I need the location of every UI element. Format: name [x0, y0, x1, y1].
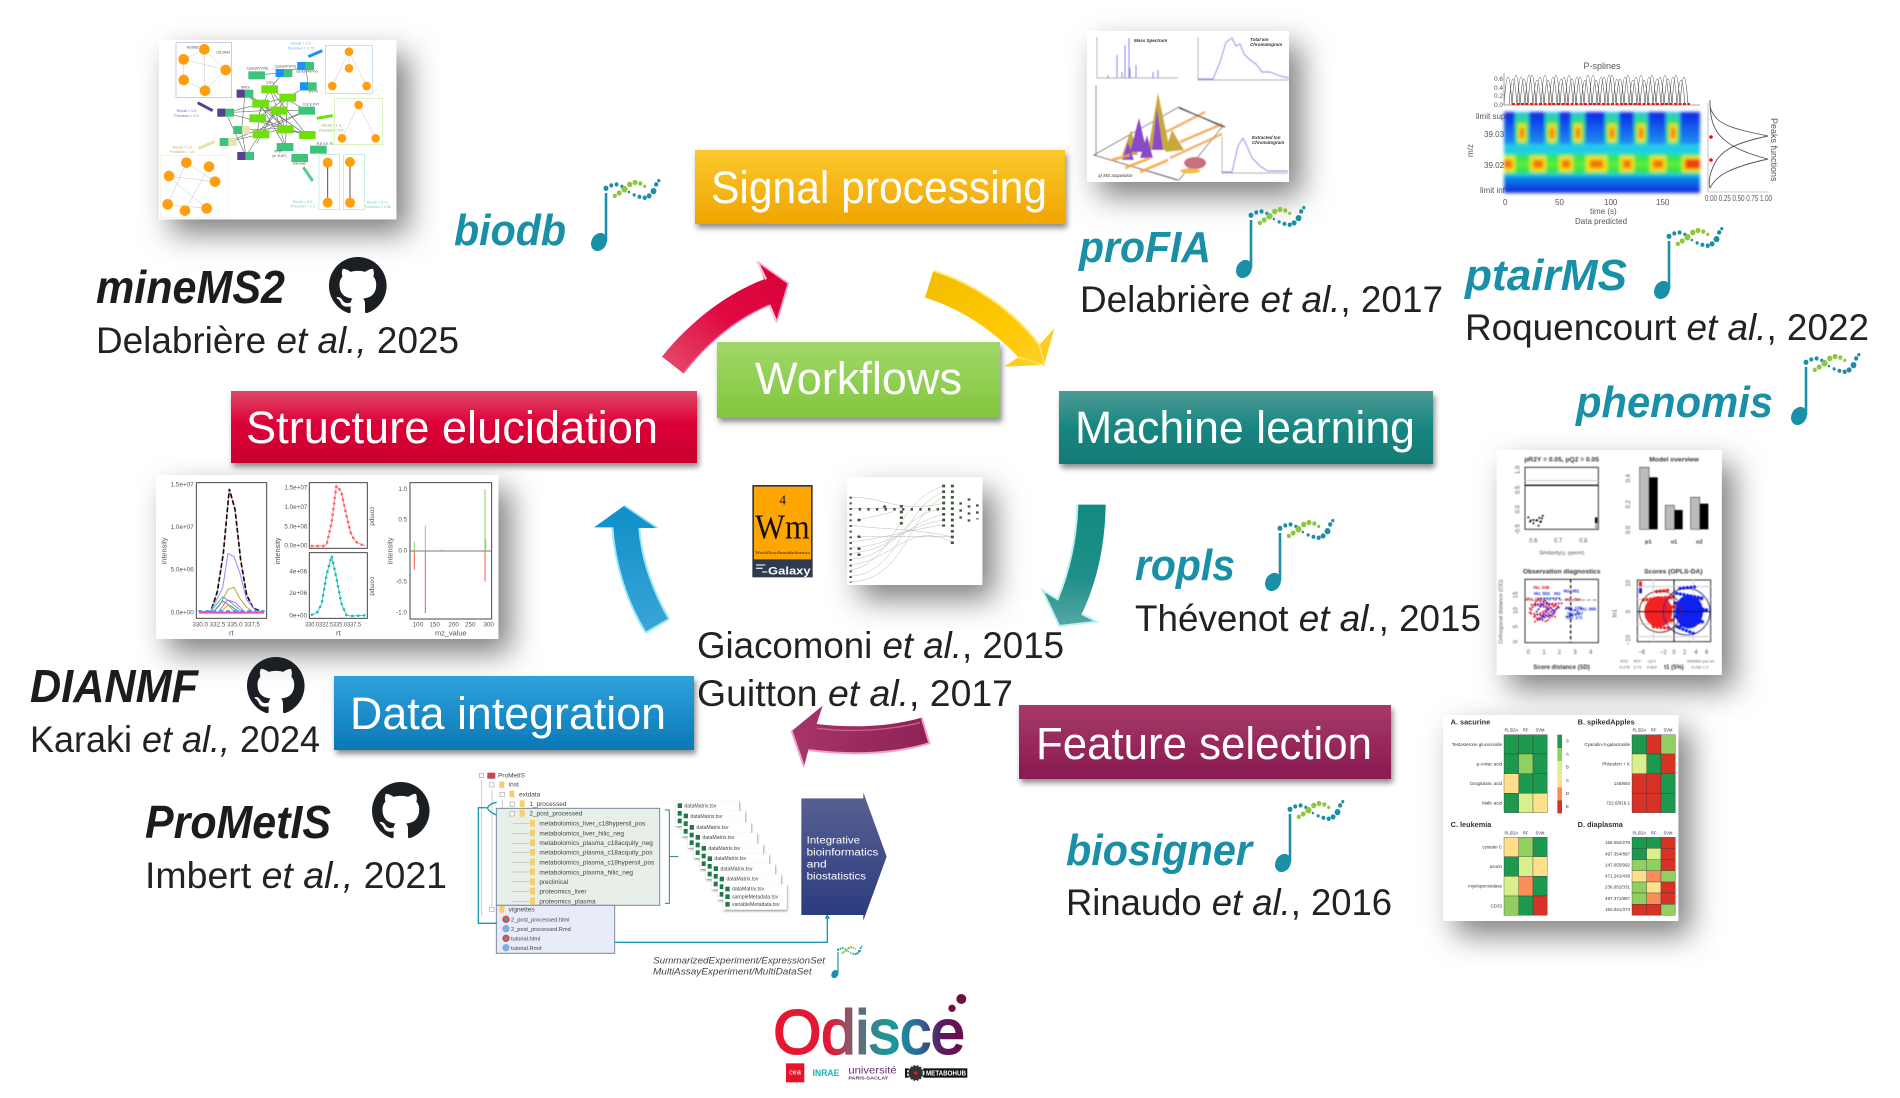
panel: ropls plots: 4: [1694, 650, 1698, 656]
chart: ptairMS heatmap with P-splines: P-splines: [1583, 61, 1621, 71]
citation: Roquencourt 2022: Roquencourt et al., 2022: [1465, 307, 1869, 348]
logo: MetaboHUB: [905, 1065, 967, 1081]
panel: DIANMF chromatograms: 5.0e+06: [284, 523, 308, 530]
file tree labels: metabolomics_plasma_c18acquity_pos: [539, 850, 653, 857]
panel: DIANMF chromatograms: 100: [413, 622, 424, 629]
chart: ptairMS heatmap with P-splines: 100: [1604, 198, 1618, 207]
chart: ptairMS heatmap with P-splines: 150: [1656, 198, 1670, 207]
file tree labels: preclinical: [539, 879, 568, 886]
panel: biosigner heatmaps: SVM: [1663, 830, 1673, 835]
panel: DIANMF chromatograms: rt: [229, 629, 235, 638]
panel: ropls plots: t1 (5%): [1664, 665, 1684, 671]
arrow: Integrative bioinformatics and biostatistics: biostatistics: [807, 871, 866, 882]
file tree labels: metabolomics_plasma_hilic_neg: [539, 869, 633, 876]
label: biosigner: biosigner: [1066, 826, 1255, 875]
panel: mineMS2 network image: VTFV: [266, 81, 275, 85]
panel: biosigner heatmaps: Phloridzin + K: [1602, 761, 1630, 766]
panel: Workflow4Metabolomics logos: [752, 485, 813, 578]
heatmap A: [1504, 735, 1547, 813]
panel: mineMS2 network image: Recall = 1.0,: [173, 145, 193, 149]
panel: mineMS2 network image: Recall = 1.0,: [291, 42, 311, 46]
file tree labels: tutorial.Rmd: [511, 946, 541, 952]
panel: ropls plots: 2: [1683, 650, 1687, 656]
panel: ropls plots: -0.5: [1515, 524, 1521, 534]
panel: biosigner heatmaps: 156.052/276: [1605, 840, 1630, 845]
panel: DIANMF chromatograms: 1.0e+07: [284, 504, 308, 511]
heatmap D: [1632, 837, 1675, 915]
icon: GitHub mineMS2: [329, 257, 387, 313]
panel: ropls plots: p1: [1645, 539, 1652, 545]
arrow: Integrative bioinformatics and biostatistics: Integrative: [807, 835, 861, 846]
caption: data classes: [653, 955, 826, 976]
panel: biosigner heatmaps: A. sacurine: [1451, 717, 1490, 726]
panel: mineMS2 network image: Precision = 0.5: [319, 128, 343, 132]
arrow: burgundy to data integration: [792, 706, 929, 767]
citation: Delabrière 2025: Delabrière et al., 2025: [96, 320, 459, 361]
logo: INRAE: INRAE: [813, 1068, 839, 1078]
panel: DIANMF chromatograms: 0.0: [398, 548, 408, 555]
panel: ropls plots: 5: [1513, 624, 1519, 628]
label: proFIA: proFIA: [1078, 223, 1211, 272]
panel: ropls plots: 15: [1513, 591, 1519, 598]
panel: biosigner heatmaps: SVM: [1663, 728, 1673, 733]
panel: DIANMF chromatograms: 250: [465, 622, 476, 629]
panel: DIANMF chromatograms: 150: [429, 622, 440, 629]
file tree labels: 2_post_processed: [529, 811, 583, 818]
wordmark: Odisce: [773, 998, 965, 1067]
panel: biosigner heatmaps: RF: [1523, 830, 1529, 835]
box: Signal processing: Signal processing: [711, 162, 1047, 213]
panel: DIANMF chromatograms: 200: [448, 622, 459, 629]
panel: ropls plots: HU_502: [1534, 591, 1550, 596]
panel: ropls plots: 0.262 1 2: [1692, 665, 1709, 670]
panel: biosigner heatmaps: CD33: [1491, 903, 1503, 908]
box: Workflows: [717, 342, 1000, 418]
heading: DIANMF: DIANMF: [30, 660, 200, 712]
arrow: yellow to machine learning: [925, 271, 1054, 367]
file tree labels: ProMetIS: [498, 773, 526, 780]
box: Structure elucidation: Structure elucidation: [246, 402, 658, 453]
panel: DIANMF chromatograms: rt: [336, 629, 342, 638]
panel: biosigner heatmaps: 145/693: [1614, 781, 1630, 786]
panel: ropls plots: 6: [1705, 650, 1709, 656]
logo: Université Paris-Saclay: [848, 1065, 897, 1080]
panel: biosigner heatmaps: [1443, 715, 1678, 921]
panel: DIANMF chromatograms: 4e+06: [289, 568, 308, 575]
panel: ropls plots: Score distance (SD): [1533, 665, 1590, 671]
panel: DIANMF chromatograms: compd: [369, 577, 376, 596]
icons: tree expanders: [479, 773, 514, 912]
stacked data tables: dataMatrix.tsv: [696, 825, 729, 831]
panel: DIANMF chromatograms: intensity: [160, 537, 169, 564]
panel: ropls plots: 0.275: [1620, 665, 1630, 670]
panel: biosigner heatmaps: Malic acid: [1482, 801, 1503, 806]
arrow: red to signal processing: [662, 262, 788, 373]
file tree labels: [498, 773, 655, 952]
panel: ropls plots: HU_047: [1567, 611, 1584, 616]
arrow: Integrative bioinformatics and biostatistics: bioinformatics: [807, 847, 878, 858]
panel: mineMS2 network image: Recall = 0.71,: [367, 200, 389, 204]
chart: ptairMS heatmap with P-splines: 0.4: [1494, 85, 1503, 92]
panel: mineMS2 network image: VFVF: [274, 150, 283, 154]
panel: ropls plots: Observation diagnostics: [1523, 568, 1601, 575]
chart: ptairMS heatmap with P-splines: 0.6: [1494, 76, 1503, 83]
panel: mineMS2 network image: Precision = 0.75: [288, 47, 314, 51]
panel: ropls plots: 2: [1558, 650, 1562, 656]
panel: biosigner heatmaps: C. leukemia: [1451, 820, 1492, 829]
panel: mineMS2 network image: Recall = 0.9,: [293, 200, 313, 204]
panel: ropls plots: 1: [1542, 650, 1546, 656]
icon: biodb music note: [588, 179, 660, 254]
panel: ropls plots: o2: [1696, 539, 1703, 545]
panel: ropls plots: −10: [1626, 634, 1632, 645]
panel: proFIA acquisition image: Chromatogram: [1252, 140, 1284, 145]
stacked data tables: dataMatrix.tsv: [690, 814, 723, 820]
panel: ropls plots: HU_128: [1526, 597, 1542, 602]
panel: DIANMF chromatograms: 1.0e+07: [171, 524, 194, 531]
panel: DIANMF chromatograms: 0e+00: [289, 613, 308, 620]
chart: ptairMS heatmap with P-splines: 50: [1555, 198, 1564, 207]
panel: ropls plots: −6: [1638, 650, 1646, 656]
icon: ptairMS music note: [1651, 227, 1723, 302]
chart: ptairMS heatmap with P-splines: [1466, 61, 1779, 226]
citation: Giacomoni 2015: Giacomoni et al., 2015: [697, 625, 1064, 666]
panel: DIANMF chromatograms: 1.5e+07: [171, 481, 194, 488]
legend: S: [1566, 738, 1569, 743]
stacked data tables: dataMatrix.tsv: [702, 835, 735, 841]
chart: ptairMS heatmap with P-splines: 0.2: [1494, 93, 1503, 100]
panel: ropls plots: 1.0: [1515, 465, 1521, 474]
chart: ptairMS heatmap with P-splines: limit sup: [1476, 112, 1506, 121]
panel: mineMS2 network image: Cyclo(EVVVE): [247, 66, 268, 70]
panel: biosigner heatmaps: azurin: [1490, 864, 1503, 869]
panel: biosigner heatmaps: PLSDA: [1633, 830, 1646, 835]
panel: DIANMF chromatograms: -1.0: [396, 610, 407, 617]
panel: ropls plots: 0.602: [1647, 665, 1658, 670]
icon: phenomis music note: [1788, 353, 1860, 428]
panel: DIANMF chromatograms: 1.0: [398, 486, 408, 493]
citation: Imbert 2021: Imbert et al., 2021: [145, 855, 447, 896]
chart: ptairMS heatmap with P-splines: m/z: [1466, 144, 1475, 157]
chart: ptairMS heatmap with P-splines: 0: [1503, 198, 1508, 207]
stacked data tables: sampleMetadata.tsv: [732, 894, 779, 900]
box: Machine learning: [1059, 391, 1433, 464]
icons: folders: [499, 781, 535, 913]
panel: biosigner heatmaps: 236.052/331: [1605, 885, 1630, 890]
arrow: teal to feature selection: [1042, 505, 1106, 626]
panel: ropls plots: 0.73: [1633, 665, 1642, 670]
panel: DIANMF chromatograms: 0.5: [398, 517, 408, 524]
file tree labels: 1_processed: [529, 801, 567, 808]
panel: ropls plots: 0.2: [1626, 500, 1632, 508]
box: Data integration: [334, 676, 694, 750]
panel: ropls plots: 0.0: [1515, 505, 1521, 513]
panel: biosigner heatmaps: Cyanidin-3-galactoside: [1584, 742, 1630, 747]
icon: small music note: [830, 946, 862, 979]
chart: ptairMS heatmap with P-splines: time (s): [1590, 207, 1617, 216]
panel: ropls plots: 0.7: [1554, 539, 1563, 545]
panel: mineMS2 network image: Cyclo(VRVVV): [296, 70, 318, 74]
legend: [1557, 735, 1569, 813]
panel: biosigner heatmaps: p-Anisic acid: [1477, 761, 1503, 766]
panel: mineMS2 network image: (or VLVF): [272, 154, 287, 158]
panel: biosigner heatmaps: RF: [1523, 728, 1529, 733]
panel: DIANMF chromatograms: 300: [483, 622, 494, 629]
file tree labels: metabolomics_liver_c18hypersil_pos: [539, 821, 646, 828]
icon: GitHub ProMetIS: [372, 782, 430, 838]
panel: DIANMF chromatograms: 330.0332.5335.0337.5: [305, 622, 361, 629]
icons: file bullets: [487, 773, 510, 951]
panel: ropls plots: 10: [1513, 607, 1519, 614]
logo: CEA: [786, 1063, 804, 1082]
panel: DIANMF chromatograms: -0.5: [396, 578, 407, 585]
panel: Workflow4Metabolomics logos: Wm: [755, 509, 810, 547]
icon: GitHub DIANMF: [247, 657, 305, 713]
label: ropls: ropls: [1135, 541, 1235, 590]
panel: ropls plots: 4: [1589, 650, 1593, 656]
panel: DIANMF chromatograms: 2e+06: [289, 590, 308, 597]
panel: ropls plots: HU_038: [1533, 585, 1550, 590]
caption: data classes: SummarizedExperiment/ExpressionSet: [653, 955, 826, 965]
stacked data tables: dataMatrix.tsv: [720, 866, 753, 872]
legend: C: [1566, 778, 1569, 783]
panel: mineMS2 network image: Precision = 0.88: [365, 205, 391, 209]
panel: proFIA acquisition image: Total Ion: [1250, 37, 1269, 42]
panel: mineMS2 network image: 131.0943: [216, 50, 230, 54]
panel: mineMS2 network image: Cyclo(VFVFV): [275, 65, 296, 69]
chart: ptairMS heatmap with P-splines: 39.03: [1484, 130, 1505, 139]
chart: ptairMS heatmap with P-splines: 0.0: [1494, 102, 1503, 109]
logo: Odiscé and partners: [773, 994, 967, 1082]
panel: biosigner heatmaps: Oxoglutaric acid: [1470, 781, 1503, 786]
panel: ropls plots: HU_069: [1580, 607, 1596, 612]
panel: mineMS2 network image: Recall = 1.0,: [321, 124, 342, 128]
panel: biosigner heatmaps: 497.354/887: [1605, 851, 1630, 856]
heatmap C: [1504, 837, 1547, 915]
citation: Thévenot 2015: Thévenot et al., 2015: [1135, 598, 1481, 639]
panel: Workflow4Metabolomics logos: Workflow4metabolomics: [755, 550, 811, 555]
citation: Delabrière 2017: Delabrière et al., 2017: [1080, 279, 1443, 320]
panel: ropls plots: HU_051: [1563, 589, 1580, 594]
panel: mineMS2 network image: Precision = 1.0: [291, 205, 315, 209]
file tree labels: metabolomics_liver_hilic_neg: [539, 830, 624, 837]
panel: mineMS2 network image: WVVV: [308, 90, 319, 94]
chart: ptairMS heatmap with P-splines: limit inf: [1480, 186, 1506, 195]
logo: Université Paris-Saclay: université: [848, 1065, 897, 1076]
icon: ropls music note: [1262, 519, 1334, 594]
heatmap B: [1632, 735, 1675, 813]
panel: ropls plots: 0.6: [1529, 539, 1538, 545]
panel: biosigner heatmaps: 152.041/373: [1605, 907, 1630, 912]
stacked data tables: dataMatrix.tsv: [726, 877, 759, 883]
panel: biosigner heatmaps: PLSDA: [1633, 728, 1646, 733]
stacked data tables: dataMatrix.tsv: [684, 804, 717, 810]
panel: ropls plots: Orthogonal distance (OD): [1499, 579, 1505, 644]
stacked data tables: variableMetadata.tsv: [732, 902, 780, 908]
logo: MetaboHUB: METABOHUB: [926, 1071, 966, 1078]
panel: mineMS2 network image: [159, 40, 396, 219]
panel: ropls plots: 3: [1573, 650, 1577, 656]
citation: Rinaudo 2016: Rinaudo et al., 2016: [1066, 882, 1392, 923]
file tree labels: inst: [509, 782, 519, 789]
file tree labels: metabolomics_plasma_c18hypersil_pos: [539, 859, 655, 866]
panel: biosigner heatmaps: 471.241/438: [1605, 874, 1630, 879]
panel: file tree selections: [496, 808, 660, 953]
label: ptairMS: ptairMS: [1464, 251, 1627, 300]
panel: ropls plots: 0.0: [1626, 525, 1632, 534]
icon: biosigner music note: [1272, 800, 1344, 875]
panel: Galaxy workflow graph: [847, 477, 982, 585]
panel: DIANMF chromatograms: intensity: [385, 537, 394, 564]
panel: biosigner heatmaps: SVM: [1535, 830, 1545, 835]
panel: ropls plots: 0: [1672, 650, 1676, 656]
panel: biosigner heatmaps: Testosterone glucuronide: [1452, 742, 1503, 747]
panel: ropls plots: 10: [1626, 579, 1632, 587]
panel: Workflow4Metabolomics logos: 4: [779, 493, 786, 508]
panel: ropls plots: o1: [1671, 539, 1677, 545]
panel: biosigner heatmaps: 497.371/887: [1605, 896, 1630, 901]
panel: ropls plots: HU_094: [1565, 597, 1581, 602]
panel: ropls plots: Similarity(y, yperm): [1539, 551, 1584, 557]
heading: ProMetIS: ProMetIS: [145, 796, 331, 848]
legend: B: [1566, 765, 1569, 770]
icon: proFIA music note: [1233, 206, 1305, 281]
stacked data tables: dataMatrix.tsv: [714, 856, 747, 862]
panel: DIANMF chromatograms: 330.0 332.5 335.0 337.5: [192, 622, 260, 629]
box: Machine learning: Machine learning: [1075, 402, 1415, 453]
panel: ropls plots: HU: [1554, 591, 1560, 596]
panel: ropls plots: 0: [1527, 650, 1531, 656]
citation: Guitton 2017: Guitton et al., 2017: [697, 673, 1013, 714]
box: Data integration: Data integration: [350, 688, 666, 739]
panel: biosigner heatmaps: D. diaplasma: [1578, 820, 1624, 829]
panel: proFIA acquisition image: Mass Spectrum: [1134, 38, 1167, 43]
panel: proFIA acquisition image: a) MS acquisition: [1098, 173, 1133, 178]
box: Workflows: Workflows: [755, 353, 962, 404]
box: Feature selection: Feature selection: [1036, 718, 1372, 769]
panel: DIANMF chromatograms: 0.0e+00: [171, 610, 194, 617]
panel: DIANMF chromatograms: 0.0e+00: [284, 543, 308, 550]
panel: ropls plots: 0.4: [1626, 474, 1632, 482]
panel: mineMS2 network image: R.E.V.E.TV: [317, 142, 334, 146]
panel: DIANMF chromatograms: 1.5e+07: [284, 484, 308, 491]
panel: ropls plots: RMSEE pre ort: [1687, 659, 1715, 664]
panel: DIANMF chromatograms: intensity: [273, 537, 282, 564]
panel: biosigner heatmaps: SVM: [1535, 728, 1545, 733]
panel: biosigner heatmaps: cystatin C: [1482, 845, 1503, 850]
panel: DIANMF chromatograms: compd: [369, 507, 376, 526]
panel: ProMetIS data package: [478, 773, 887, 976]
panel: proFIA acquisition image: Extracted Ion: [1252, 135, 1281, 140]
panel: DIANMF chromatograms: [156, 475, 498, 639]
file tree labels: 2_post_processed.html: [511, 918, 569, 924]
panel: mineMS2 network image: VFEV: [241, 86, 250, 90]
panel: ropls plots: R2Y: [1633, 659, 1642, 664]
logo: Université Paris-Saclay: PARIS-SACLAY: [848, 1075, 889, 1080]
legend: A: [1566, 752, 1569, 757]
file tree labels: 2_post_processed.Rmd: [511, 927, 571, 933]
file tree labels: extdata: [519, 791, 541, 798]
panel: mineMS2 network image: Precision = 1.0: [170, 150, 194, 154]
panel: Workflow4Metabolomics logos: Galaxy: [768, 566, 811, 578]
panel: mineMS2 network image: Precision = 1.0: [174, 114, 199, 118]
panel: ropls plots: Q2Y: [1648, 659, 1656, 664]
panel: ropls plots: Scores (OPLS-DA): [1644, 568, 1703, 575]
chart: ptairMS heatmap with P-splines: Data predicted: [1575, 217, 1627, 226]
panel: ropls plots: HU_171: [1567, 615, 1583, 620]
panel: biosigner heatmaps: PLSDA: [1505, 728, 1518, 733]
panel: mineMS2 network image: Recall = 1.0,: [177, 109, 197, 113]
box: Structure elucidation: [231, 391, 697, 463]
panel: mineMS2 network image: unknown: [293, 162, 306, 166]
panel: biosigner heatmaps: myeloperoxidase: [1468, 884, 1502, 889]
panel: ropls plots: 0.8: [1579, 539, 1588, 545]
stacked data tables: [676, 801, 787, 910]
logo: CEA: cea: [789, 1068, 802, 1077]
box: Signal processing: [695, 150, 1065, 224]
panel: DIANMF chromatograms: mz_value: [435, 629, 467, 638]
arrow: blue to structure elucidation: [594, 506, 669, 633]
panel: ropls plots: pR2Y = 0.05, pQ2 = 0.05: [1524, 456, 1599, 463]
panel: biosigner heatmaps: B. spikedApples: [1578, 717, 1635, 726]
panel: ropls plots: 0.5: [1515, 485, 1521, 494]
chart: ptairMS heatmap with P-splines: Peaks functions: [1769, 118, 1779, 182]
panel: biosigner heatmaps: PLSDA: [1505, 830, 1518, 835]
panel: biosigner heatmaps: RF: [1651, 830, 1657, 835]
label: phenomis: phenomis: [1575, 378, 1773, 427]
arrow: Integrative bioinformatics and biostatistics: and: [807, 859, 827, 870]
stacked data tables: dataMatrix.tsv: [708, 846, 741, 852]
panel: biosigner heatmaps: RF: [1651, 728, 1657, 733]
legend: D: [1566, 791, 1569, 796]
file tree labels: vignettes: [509, 907, 535, 914]
panel: ropls plots: Model overview: [1649, 456, 1700, 463]
arrow: Integrative bioinformatics and biostatistics: [801, 792, 887, 921]
file tree labels: proteomics_plasma: [539, 899, 596, 906]
citation: Karaki 2024: Karaki et al., 2024: [30, 719, 320, 760]
panel: ropls plots: [1497, 450, 1722, 675]
stacked data tables: dataMatrix.tsv: [732, 887, 765, 893]
panel: biosigner heatmaps: 722.6/616.1: [1606, 801, 1630, 806]
file tree labels: tutorial.html: [511, 937, 540, 943]
panel: ropls plots: HU_136: [1566, 605, 1582, 610]
panel: ropls plots: 0: [1626, 609, 1632, 613]
panel: proFIA acquisition image: Chromatogram: [1250, 42, 1282, 47]
panel: biosigner heatmaps: 147.055/992: [1605, 862, 1630, 867]
panel: mineMS2 network image: 99.0682: [187, 46, 199, 50]
panel: proFIA acquisition image: [1087, 31, 1289, 182]
file tree labels: metabolomics_plasma_c18acquity_neg: [539, 840, 653, 847]
legend: E: [1566, 804, 1569, 809]
panel: ropls plots: R2X: [1620, 659, 1628, 664]
panel: ropls plots: 0: [1513, 639, 1519, 643]
panel: mineMS2 network image: R.E.E.FVT: [303, 102, 319, 106]
chart: ptairMS heatmap with P-splines: 0.00 0.25 0.50 0.75 1.00: [1705, 194, 1772, 203]
caption: data classes: MultiAssayExperiment/MultiDataSet: [653, 966, 812, 976]
heading: mineMS2: mineMS2: [96, 261, 285, 313]
panel: ropls plots: to1: [1613, 609, 1619, 617]
panel: ropls plots: −2: [1660, 650, 1667, 656]
panel: DIANMF chromatograms: 5.0e+06: [171, 567, 194, 574]
label: biodb: biodb: [454, 206, 566, 255]
chart: ptairMS heatmap with P-splines: 39.02: [1484, 161, 1505, 170]
box: Feature selection: [1019, 705, 1391, 779]
file tree labels: proteomics_liver: [539, 889, 587, 896]
